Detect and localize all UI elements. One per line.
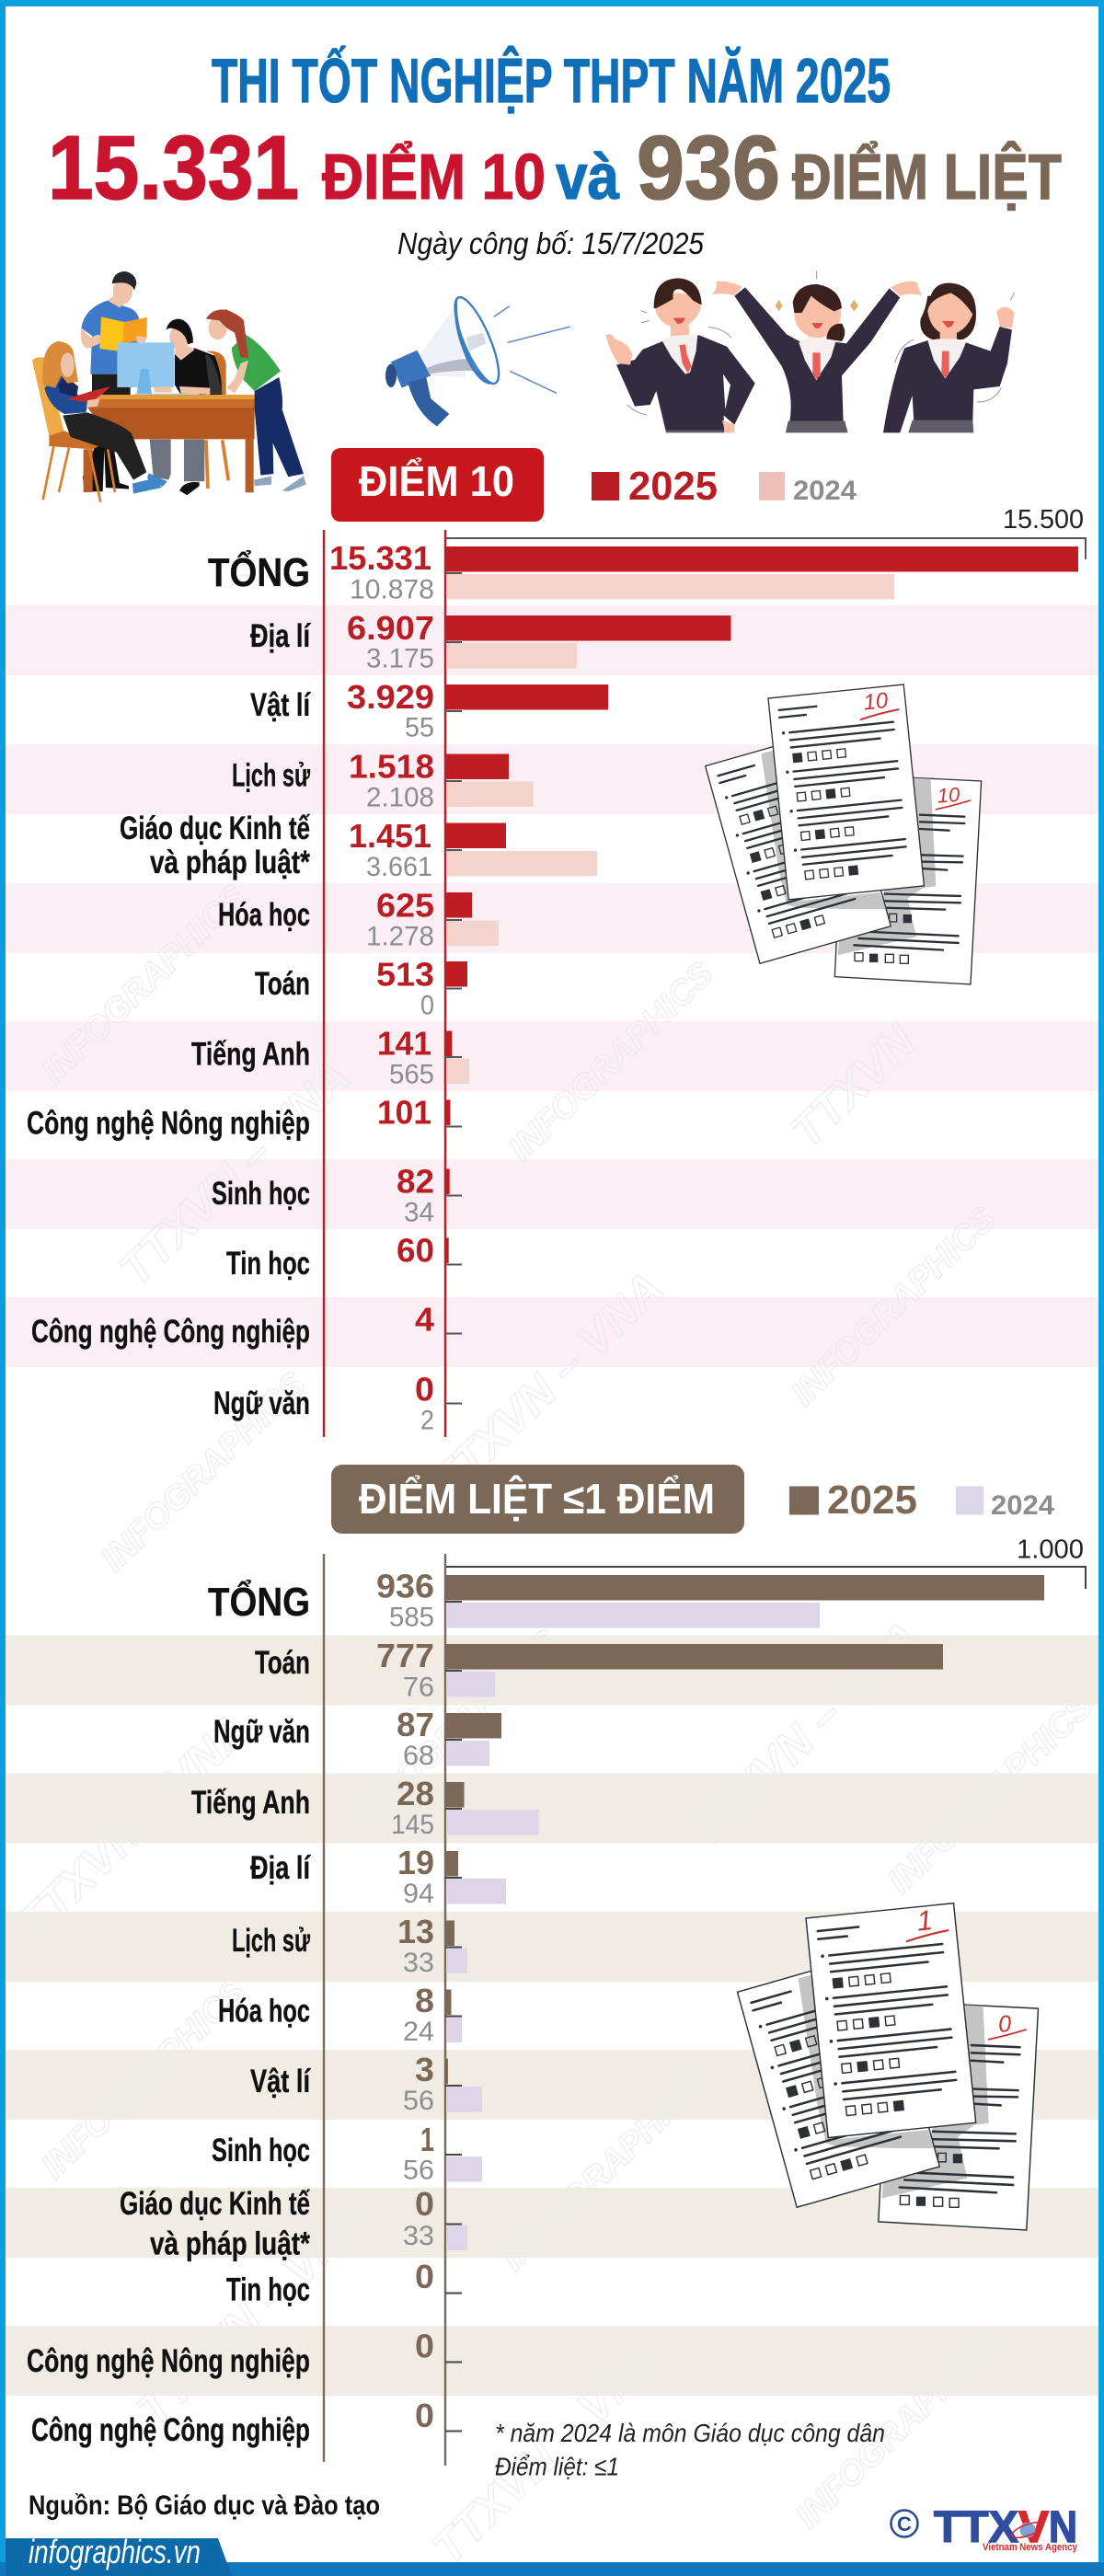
bar chart: ĐIỂM 10 — [27, 530, 1078, 1437]
headline: 15.331 — [48, 117, 299, 218]
row: Tổng — [208, 539, 1078, 605]
row: Tổng: TỔNG — [208, 1578, 310, 1625]
heading: ĐIỂM LIỆT — [331, 1465, 744, 1534]
row: Tiếng Anh: Tiếng Anh — [191, 1036, 310, 1073]
watermark: TTXVN – VNA — [422, 2329, 673, 2574]
row: Tin học: Tin học — [226, 1246, 310, 1282]
row: Tiếng Anh: 145 — [391, 1810, 434, 1840]
watermark: TTXVN – VNA — [128, 2191, 378, 2436]
row: Toán: 76 — [403, 1673, 434, 1702]
row: Giáo dục Kinh tế và pháp luật: và pháp luật* — [150, 2226, 310, 2261]
icon: cheering students — [605, 270, 1015, 432]
watermark: TTXVN – VNA — [422, 1262, 673, 1507]
row: Tin học: 0 — [415, 2258, 434, 2295]
row: Công nghệ Công nghiệp — [31, 2397, 462, 2448]
row: Hóa học: 625 — [376, 887, 434, 924]
watermark: INFOGRAPHICS — [494, 2064, 714, 2278]
row: Giáo dục Kinh tế và pháp luật — [120, 811, 597, 882]
row: Công nghệ Nông nghiệp: 101 — [377, 1093, 431, 1132]
footnote — [495, 2419, 885, 2480]
row: Giáo dục Kinh tế và pháp luật: và pháp luật* — [150, 845, 310, 880]
row: Tổng: 936 — [376, 1568, 434, 1604]
watermark: INFOGRAPHICS — [784, 1200, 1004, 1413]
logo: TTXVN — [891, 2503, 1078, 2553]
row: Địa lí: 3.175 — [366, 644, 434, 673]
row: Hóa học: Hóa học — [218, 1993, 310, 2030]
source: Nguồn: Bộ Giáo dục và Đào tạo — [29, 2490, 380, 2521]
row: Lịch sử: 13 — [397, 1913, 434, 1950]
row: Địa lí — [250, 609, 730, 673]
row: Địa lí — [250, 1844, 506, 1909]
row: Lịch sử: Lịch sử — [232, 758, 310, 793]
row: Công nghệ Nông nghiệp: Công nghệ Nông nghiệp — [27, 2343, 310, 2379]
legend: ĐIỂM LIỆT — [789, 1478, 1054, 1523]
axis maximum: 1.000: 1.000 — [1017, 1535, 1084, 1564]
row: Tin học: 60 — [397, 1231, 434, 1270]
legend: ĐIỂM LIỆT: 2024 — [991, 1490, 1054, 1521]
legend: ĐIỂM 10: 2025 — [628, 464, 718, 509]
row: Công nghệ Công nghiệp: Công nghệ Công nghiệp — [31, 1314, 310, 1350]
row: Toán: 777 — [376, 1637, 434, 1674]
row: Vật lí: 55 — [405, 712, 434, 743]
heading: ĐIỂM LIỆT: ĐIỂM LIỆT ≤1 ĐIỂM — [359, 1475, 715, 1523]
row: Công nghệ Nông nghiệp: 0 — [415, 2328, 434, 2364]
headline: 936 — [637, 117, 780, 218]
watermark: INFOGRAPHICS — [880, 1687, 1100, 1901]
row: Địa lí: Địa lí — [250, 1850, 311, 1886]
row: Ngữ văn — [213, 1371, 462, 1435]
row: Địa lí: 6.907 — [347, 609, 434, 647]
row: Tổng — [208, 1568, 1044, 1632]
icon: megaphone — [385, 293, 570, 426]
row: Tin học — [226, 2258, 462, 2307]
row: Vật lí: 3 — [415, 2051, 434, 2088]
watermark: TTXVN – VNA — [109, 1051, 360, 1295]
row: Toán: Toán — [255, 966, 310, 1002]
row: Giáo dục Kinh tế và pháp luật — [120, 2185, 467, 2261]
row: Giáo dục Kinh tế và pháp luật: Giáo dục Kinh tế — [120, 811, 310, 846]
row: Công nghệ Công nghiệp: 4 — [415, 1301, 434, 1338]
row: Ngữ văn: Ngữ văn — [213, 1386, 310, 1421]
row: Công nghệ Công nghiệp: 0 — [415, 2397, 434, 2434]
row: Sinh học: 34 — [404, 1198, 434, 1227]
row: Lịch sử — [232, 1913, 467, 1978]
watermark: INFOGRAPHICS — [34, 878, 254, 1091]
watermark: TTXVN – VNA — [680, 1612, 930, 1857]
row: Tiếng Anh: 565 — [389, 1060, 434, 1089]
row: Toán — [255, 1637, 943, 1702]
icon: exam papers scored 10: 10 — [862, 688, 890, 716]
row: Lịch sử: 1.518 — [349, 747, 434, 786]
legend: ĐIỂM LIỆT: 2025 — [827, 1478, 917, 1523]
footnote: * năm 2024 là môn Giáo dục công dân — [495, 2419, 885, 2447]
row: Sinh học — [212, 1163, 462, 1227]
icon: exam papers scored 1 and 0: 0 — [997, 2011, 1012, 2038]
row: Lịch sử: 2.108 — [366, 782, 434, 813]
publication date: Ngày công bố: 15/7/2025 — [397, 226, 705, 260]
row: Hóa học: Hóa học — [218, 897, 310, 933]
row: Địa lí: 94 — [403, 1879, 434, 1909]
row: Sinh học — [212, 2121, 482, 2186]
logo: TTXVN: N — [1049, 2503, 1077, 2552]
row: Sinh học: Sinh học — [212, 1176, 310, 1212]
watermark: INFOGRAPHICS — [347, 1623, 567, 1836]
watermark: INFOGRAPHICS — [788, 2322, 1008, 2536]
watermark: INFOGRAPHICS — [34, 1972, 254, 2186]
logo: TTXVN: Vietnam News Agency — [983, 2542, 1078, 2553]
icon: exam papers scored 1 and 0 — [738, 1903, 1038, 2230]
icon: people studying at a desk — [32, 271, 306, 502]
icon: exam papers scored 1 and 0: 1 — [915, 1904, 934, 1938]
row: Công nghệ Nông nghiệp — [27, 1093, 462, 1141]
row: Tổng: 15.331 — [329, 539, 431, 577]
row: Sinh học: Sinh học — [212, 2133, 310, 2168]
watermark: INFOGRAPHICS — [501, 955, 721, 1168]
axis maximum: 15.500 — [446, 505, 1086, 559]
watermark — [8, 878, 1100, 2574]
logo: TTXVN: TTX — [934, 2503, 1018, 2552]
row: Tiếng Anh: Tiếng Anh — [191, 1785, 310, 1821]
row: Vật lí — [250, 2051, 482, 2116]
row: Tiếng Anh: 141 — [377, 1025, 431, 1062]
row: Hóa học: 24 — [403, 2017, 434, 2047]
bar chart: ĐIỂM LIỆT — [27, 1554, 1044, 2466]
row: Toán: Toán — [255, 1645, 310, 1681]
axis maximum: 15.500: 15.500 — [1003, 505, 1084, 535]
row: Tin học — [226, 1231, 462, 1282]
row: Ngữ văn: 2 — [420, 1406, 434, 1435]
row: Giáo dục Kinh tế và pháp luật: 3.661 — [366, 852, 432, 882]
row: Công nghệ Công nghiệp: Công nghệ Công nghiệp — [31, 2412, 310, 2448]
headline — [48, 117, 1062, 218]
row: Tổng: 585 — [389, 1603, 434, 1632]
row: Sinh học: 82 — [397, 1163, 434, 1200]
heading: ĐIỂM 10 — [331, 448, 544, 522]
heading: ĐIỂM 10: ĐIỂM 10 — [359, 457, 514, 505]
row: Công nghệ Công nghiệp — [31, 1301, 462, 1350]
row: Sinh học: 1 — [420, 2121, 434, 2158]
row: Lịch sử — [232, 747, 534, 813]
watermark: TTXVN — [781, 1015, 926, 1157]
logo: TTXVN: C — [897, 2513, 912, 2536]
row: Toán: 513 — [376, 955, 434, 994]
row: Hóa học — [218, 887, 499, 951]
row: Ngữ văn: Ngữ văn — [213, 1714, 310, 1750]
legend: ĐIỂM 10 — [592, 464, 857, 509]
row: Tổng: 10.878 — [350, 574, 434, 605]
row: Hóa học: 8 — [415, 1982, 434, 2019]
headline: và — [556, 141, 620, 213]
headline: ĐIỂM LIỆT — [792, 140, 1062, 213]
row: Ngữ văn: 0 — [415, 1371, 434, 1408]
row: Tiếng Anh — [191, 1775, 539, 1840]
row: Toán — [255, 955, 467, 1021]
row: Địa lí: 19 — [397, 1844, 434, 1881]
row: Địa lí: Địa lí — [250, 618, 311, 654]
row: Tiếng Anh — [191, 1025, 469, 1089]
footnote: Điểm liệt: ≤1 — [495, 2453, 619, 2480]
section background bands — [6, 605, 1098, 2396]
headline: ĐIỂM 10 — [322, 140, 546, 213]
row: Tổng: TỔNG — [208, 548, 310, 595]
row: Vật lí: Vật lí — [250, 2064, 311, 2099]
icon: exam papers scored 10 — [706, 684, 982, 984]
row: Sinh học: 56 — [403, 2155, 434, 2186]
row: Ngữ văn — [213, 1706, 501, 1771]
watermark: TTXVN – VNA — [8, 1704, 259, 1949]
row: Tin học: Tin học — [226, 2272, 310, 2307]
row: Công nghệ Nông nghiệp — [27, 2328, 462, 2379]
row: Vật lí: 3.929 — [347, 678, 434, 716]
row: Vật lí: 56 — [403, 2086, 434, 2116]
row: Giáo dục Kinh tế và pháp luật: 1.451 — [349, 817, 431, 855]
row: Hóa học: 1.278 — [366, 922, 434, 951]
row: Tiếng Anh: 28 — [397, 1775, 434, 1812]
row: Giáo dục Kinh tế và pháp luật: 33 — [403, 2221, 434, 2251]
watermark: INFOGRAPHICS — [94, 1365, 314, 1579]
logo: TTXVN: V — [1018, 2503, 1049, 2552]
row: Toán: 0 — [420, 990, 434, 1021]
row: Ngữ văn: 87 — [397, 1706, 434, 1743]
legend: ĐIỂM 10: 2024 — [793, 476, 857, 506]
row: Giáo dục Kinh tế và pháp luật: 0 — [415, 2185, 434, 2223]
row: Công nghệ Nông nghiệp: Công nghệ Nông nghiệp — [27, 1106, 310, 1141]
row: Ngữ văn: 68 — [403, 1741, 434, 1771]
axis maximum: 1.000 — [446, 1535, 1086, 1589]
row: Vật lí — [250, 678, 608, 743]
footer banner: infographics.vn: infographics.vn — [29, 2533, 201, 2570]
row: Vật lí: Vật lí — [250, 687, 311, 723]
row: Giáo dục Kinh tế và pháp luật: Giáo dục Kinh tế — [120, 2186, 310, 2222]
row: Lịch sử: Lịch sử — [232, 1923, 310, 1959]
row: Lịch sử: 33 — [403, 1948, 434, 1978]
row: Hóa học — [218, 1982, 462, 2047]
icon: exam papers scored 10: 10 — [937, 783, 961, 808]
